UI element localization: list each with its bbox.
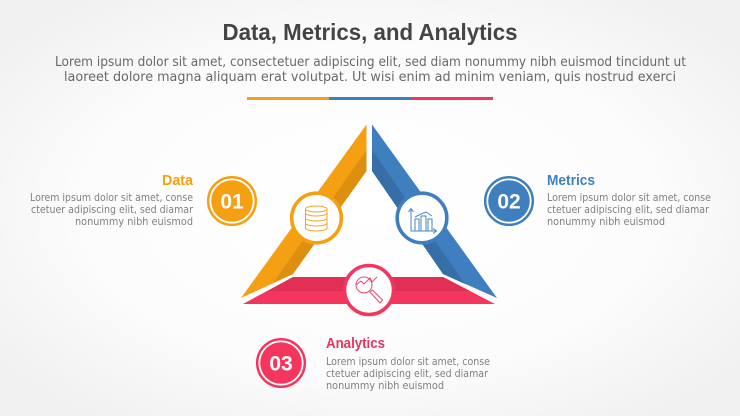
triangle segment: blue (372, 124, 497, 298)
block: Metrics: Metrics (547, 172, 595, 189)
subtitle text: laoreet dolore magna aliquam erat volutpat. Ut wisi enim ad minim veniam, quis nostrud exerci (64, 70, 676, 85)
block: Data: ctetuer adipiscing elit, sed diamar (31, 204, 194, 216)
icon circle: analytics (344, 266, 394, 314)
triangle segment: orange (241, 124, 366, 298)
block: Analytics (326, 335, 490, 392)
icon circle: chart (397, 193, 447, 243)
block: Metrics (547, 172, 711, 228)
number badge: 03: 03 (269, 352, 293, 376)
number badge: 03 (257, 339, 305, 387)
number badge: 01 (208, 177, 256, 225)
block: Data: nonummy nibh euismod (75, 216, 193, 228)
block: Metrics: nonummy nibh euismod (547, 216, 665, 228)
icon: magnifier with trend line (356, 277, 382, 303)
number badge: 02 (485, 177, 533, 225)
block: Analytics: ctetuer adipiscing elit, sed diamar (326, 368, 489, 380)
subtitle text (55, 55, 686, 85)
block: Metrics: Lorem ipsum dolor sit amet, conse (547, 192, 711, 204)
block: Analytics: Analytics (326, 335, 385, 352)
block: Data: Lorem ipsum dolor sit amet, conse (30, 192, 193, 204)
icon: bar chart (408, 208, 436, 234)
number badge: 01: 01 (220, 190, 244, 214)
icon circle: database (292, 193, 341, 243)
block: Analytics: nonummy nibh euismod (326, 380, 444, 392)
icon: database (306, 206, 327, 231)
subtitle text: Lorem ipsum dolor sit amet, consectetuer adipiscing elit, sed diam nonummy nibh euismod tincidunt ut (55, 55, 686, 70)
block: Analytics: Lorem ipsum dolor sit amet, conse (326, 356, 490, 368)
title: Data, Metrics, and Analytics (222, 19, 518, 45)
number badge: 02: 02 (497, 190, 521, 214)
triangle segment: red (243, 277, 495, 304)
tricolour divider (247, 97, 493, 100)
block: Data (30, 172, 194, 228)
block: Metrics: ctetuer adipiscing elit, sed diamar (547, 204, 710, 216)
block: Data: Data (162, 172, 194, 189)
